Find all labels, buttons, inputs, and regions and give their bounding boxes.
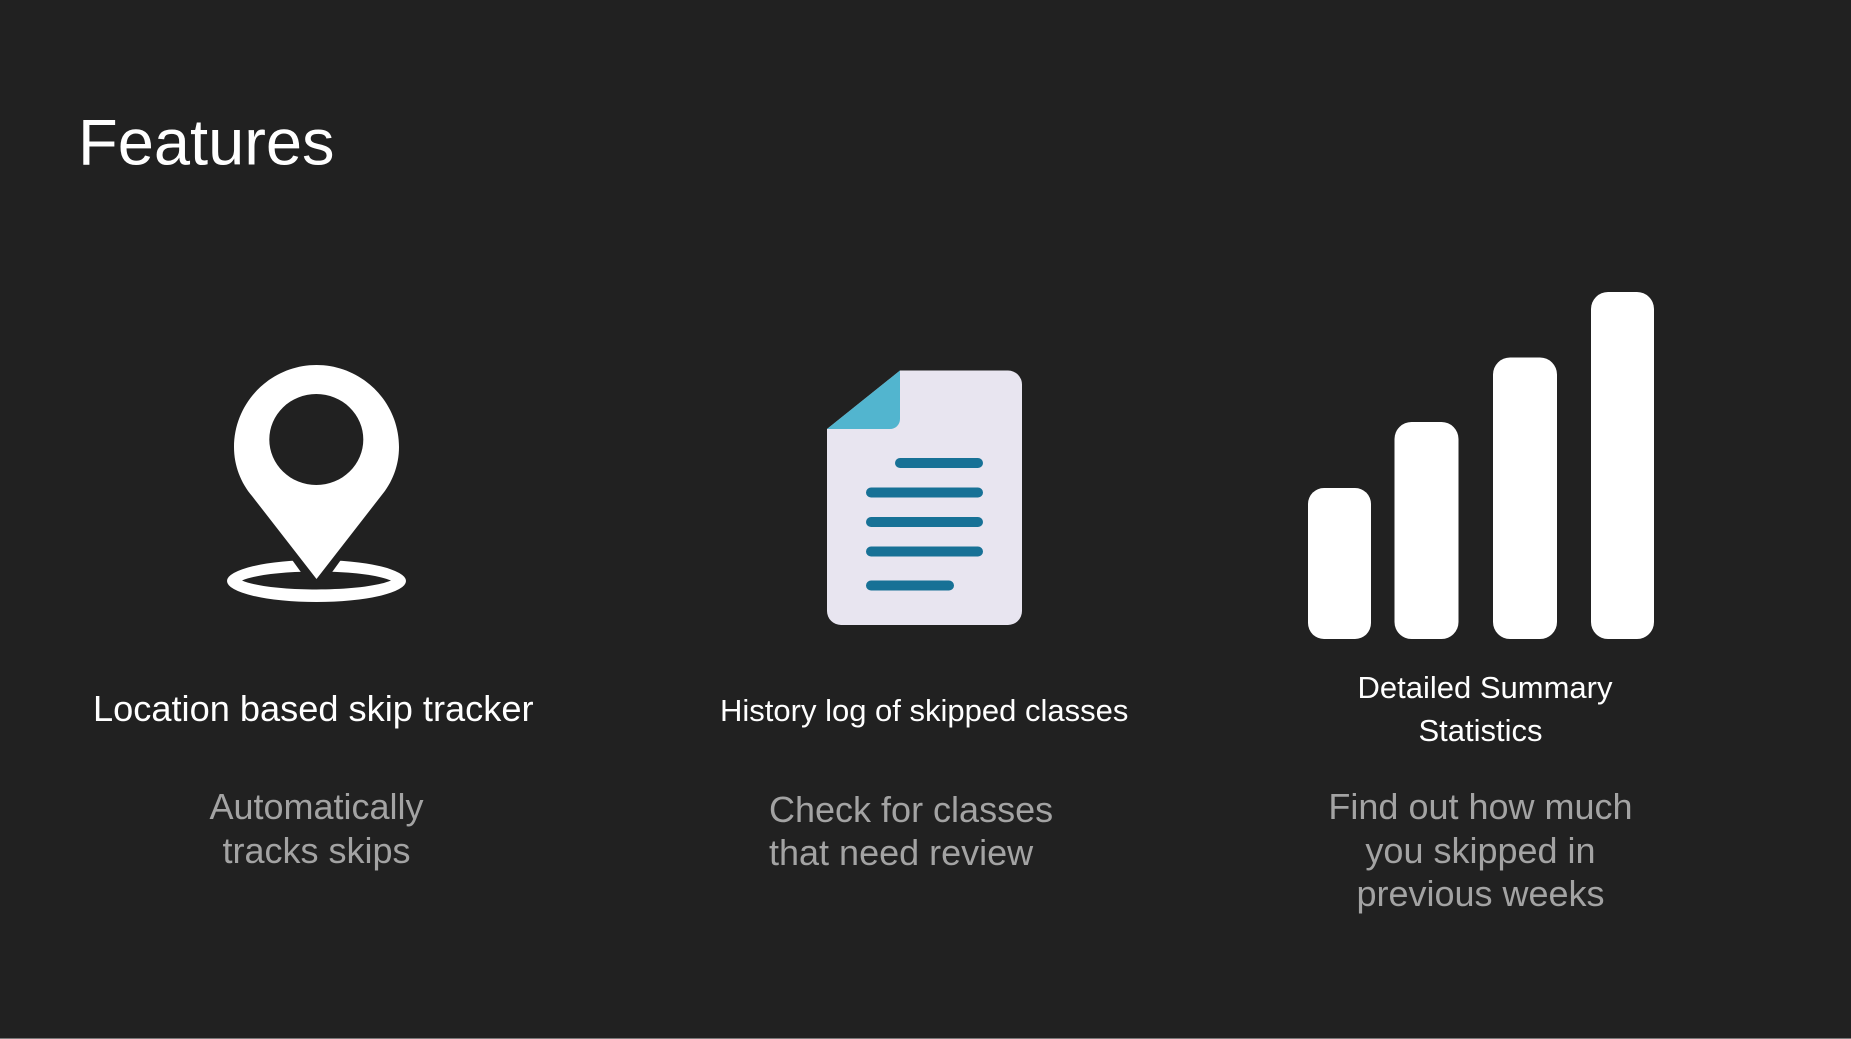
- heading: detailed summary statistics: Statistics: [1418, 713, 1543, 748]
- heading: history log of skipped classes: History log of skipped classes: [720, 693, 1128, 728]
- text: automatically tracks skips: tracks skips: [222, 830, 411, 871]
- icon: bar chart: [1308, 292, 1654, 639]
- text: check for classes that need review: [769, 789, 1053, 873]
- panel: location tracker: [93, 365, 534, 871]
- text: find out how much you skipped in previous weeks: you skipped in: [1365, 830, 1596, 871]
- text: check for classes that need review: Check for classes: [769, 789, 1053, 830]
- panel: summary statistics: [1308, 292, 1654, 914]
- title: Features: [78, 106, 335, 178]
- heading: detailed summary statistics: [1358, 670, 1613, 748]
- icon: location pin: [227, 365, 406, 602]
- text: check for classes that need review: that need review: [769, 832, 1034, 873]
- icon: document: [827, 370, 1022, 625]
- heading: detailed summary statistics: Detailed Summary: [1358, 670, 1613, 705]
- text: find out how much you skipped in previous weeks: [1328, 786, 1633, 914]
- text: find out how much you skipped in previous weeks: previous weeks: [1356, 873, 1605, 914]
- text: find out how much you skipped in previous weeks: Find out how much: [1328, 786, 1633, 827]
- text: automatically tracks skips: [209, 786, 424, 871]
- heading: location based skip tracker: Location based skip tracker: [93, 688, 534, 729]
- text: automatically tracks skips: Automatically: [209, 786, 424, 827]
- panel: history log: [720, 370, 1128, 873]
